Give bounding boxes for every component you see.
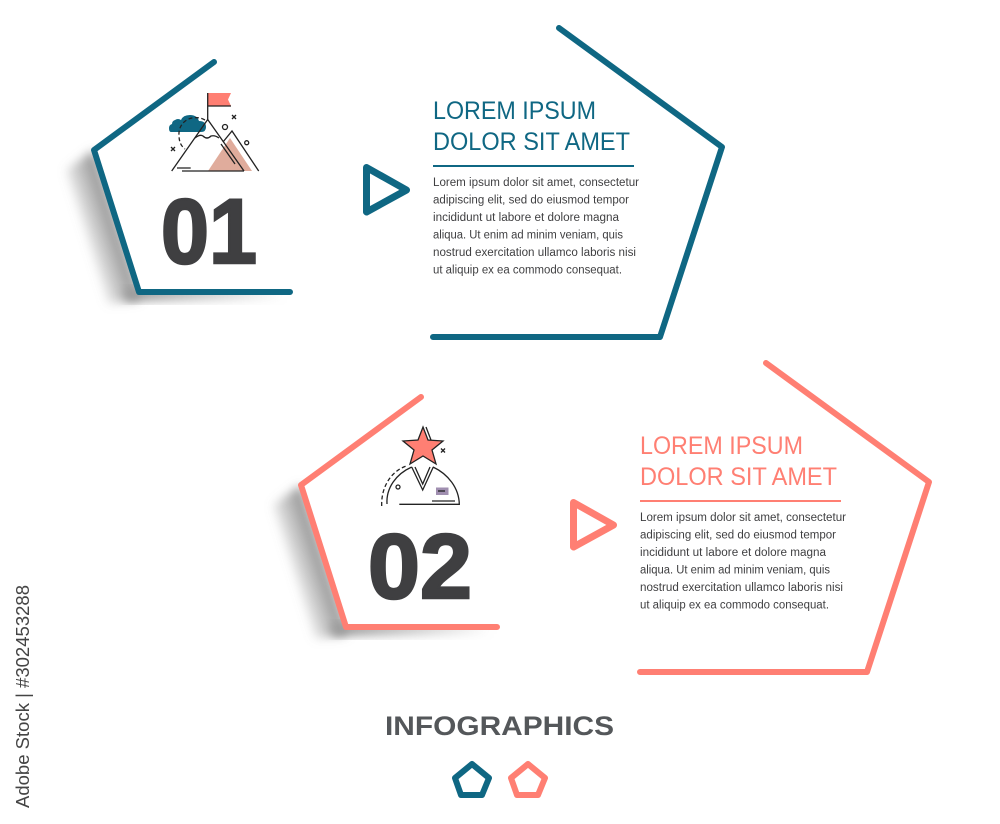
heading 01: LOREM IPSUM [433, 97, 596, 125]
heading 02: LOREM IPSUM [640, 432, 803, 460]
small pentagon outline 01 [94, 62, 290, 292]
body text 01 [433, 177, 639, 276]
body text 02: aliqua. Ut enim ad minim veniam, quis [640, 564, 830, 576]
body text 01: aliqua. Ut enim ad minim veniam, quis [433, 230, 623, 242]
drop shadow 01 [66, 62, 290, 304]
icon: teal pentagon [455, 764, 489, 795]
body text 01: Lorem ipsum dolor sit amet, consectetur [433, 177, 639, 189]
body text 01: adipiscing elit, sed do eiusmod tempor [433, 194, 629, 206]
body text 02: ut aliquip ex ea commodo consequat. [640, 600, 829, 612]
body text 01: nostrud exercitation ullamco laboris nisi [433, 247, 636, 259]
heading 01 [433, 97, 630, 156]
arrow 01 [366, 168, 406, 212]
footer title: INFOGRAPHICS [385, 711, 614, 741]
large pentagon outline 02 [640, 363, 929, 672]
heading rule 01 [433, 165, 634, 167]
panel: step 02 [273, 363, 929, 672]
small pentagon outline 02 [301, 397, 497, 627]
arrow 02 [574, 502, 614, 547]
body text 02: Lorem ipsum dolor sit amet, consectetur [640, 512, 846, 524]
heading 02 [640, 432, 837, 491]
heading rule 02 [640, 500, 841, 502]
number 02: 02 [368, 516, 472, 618]
body text 01: incididunt ut labore et dolore magna [433, 212, 620, 224]
panel: step 01 [66, 28, 722, 337]
body text 02: adipiscing elit, sed do eiusmod tempor [640, 530, 836, 542]
icon: person with star [382, 427, 459, 506]
heading 02: DOLOR SIT AMET [640, 463, 837, 491]
body text 01: ut aliquip ex ea commodo consequat. [433, 264, 622, 276]
body text 02: nostrud exercitation ullamco laboris nisi [640, 582, 843, 594]
stock credit: Adobe Stock | #302453288 [13, 585, 33, 808]
large pentagon outline 01 [433, 28, 722, 337]
body text 02: incididunt ut labore et dolore magna [640, 547, 827, 559]
number 01: 01 [161, 181, 257, 283]
icon: coral pentagon [511, 764, 545, 795]
heading 01: DOLOR SIT AMET [433, 128, 630, 156]
drop shadow 02 [273, 397, 497, 639]
body text 02 [640, 512, 846, 612]
icon: mountain with flag [169, 93, 259, 171]
